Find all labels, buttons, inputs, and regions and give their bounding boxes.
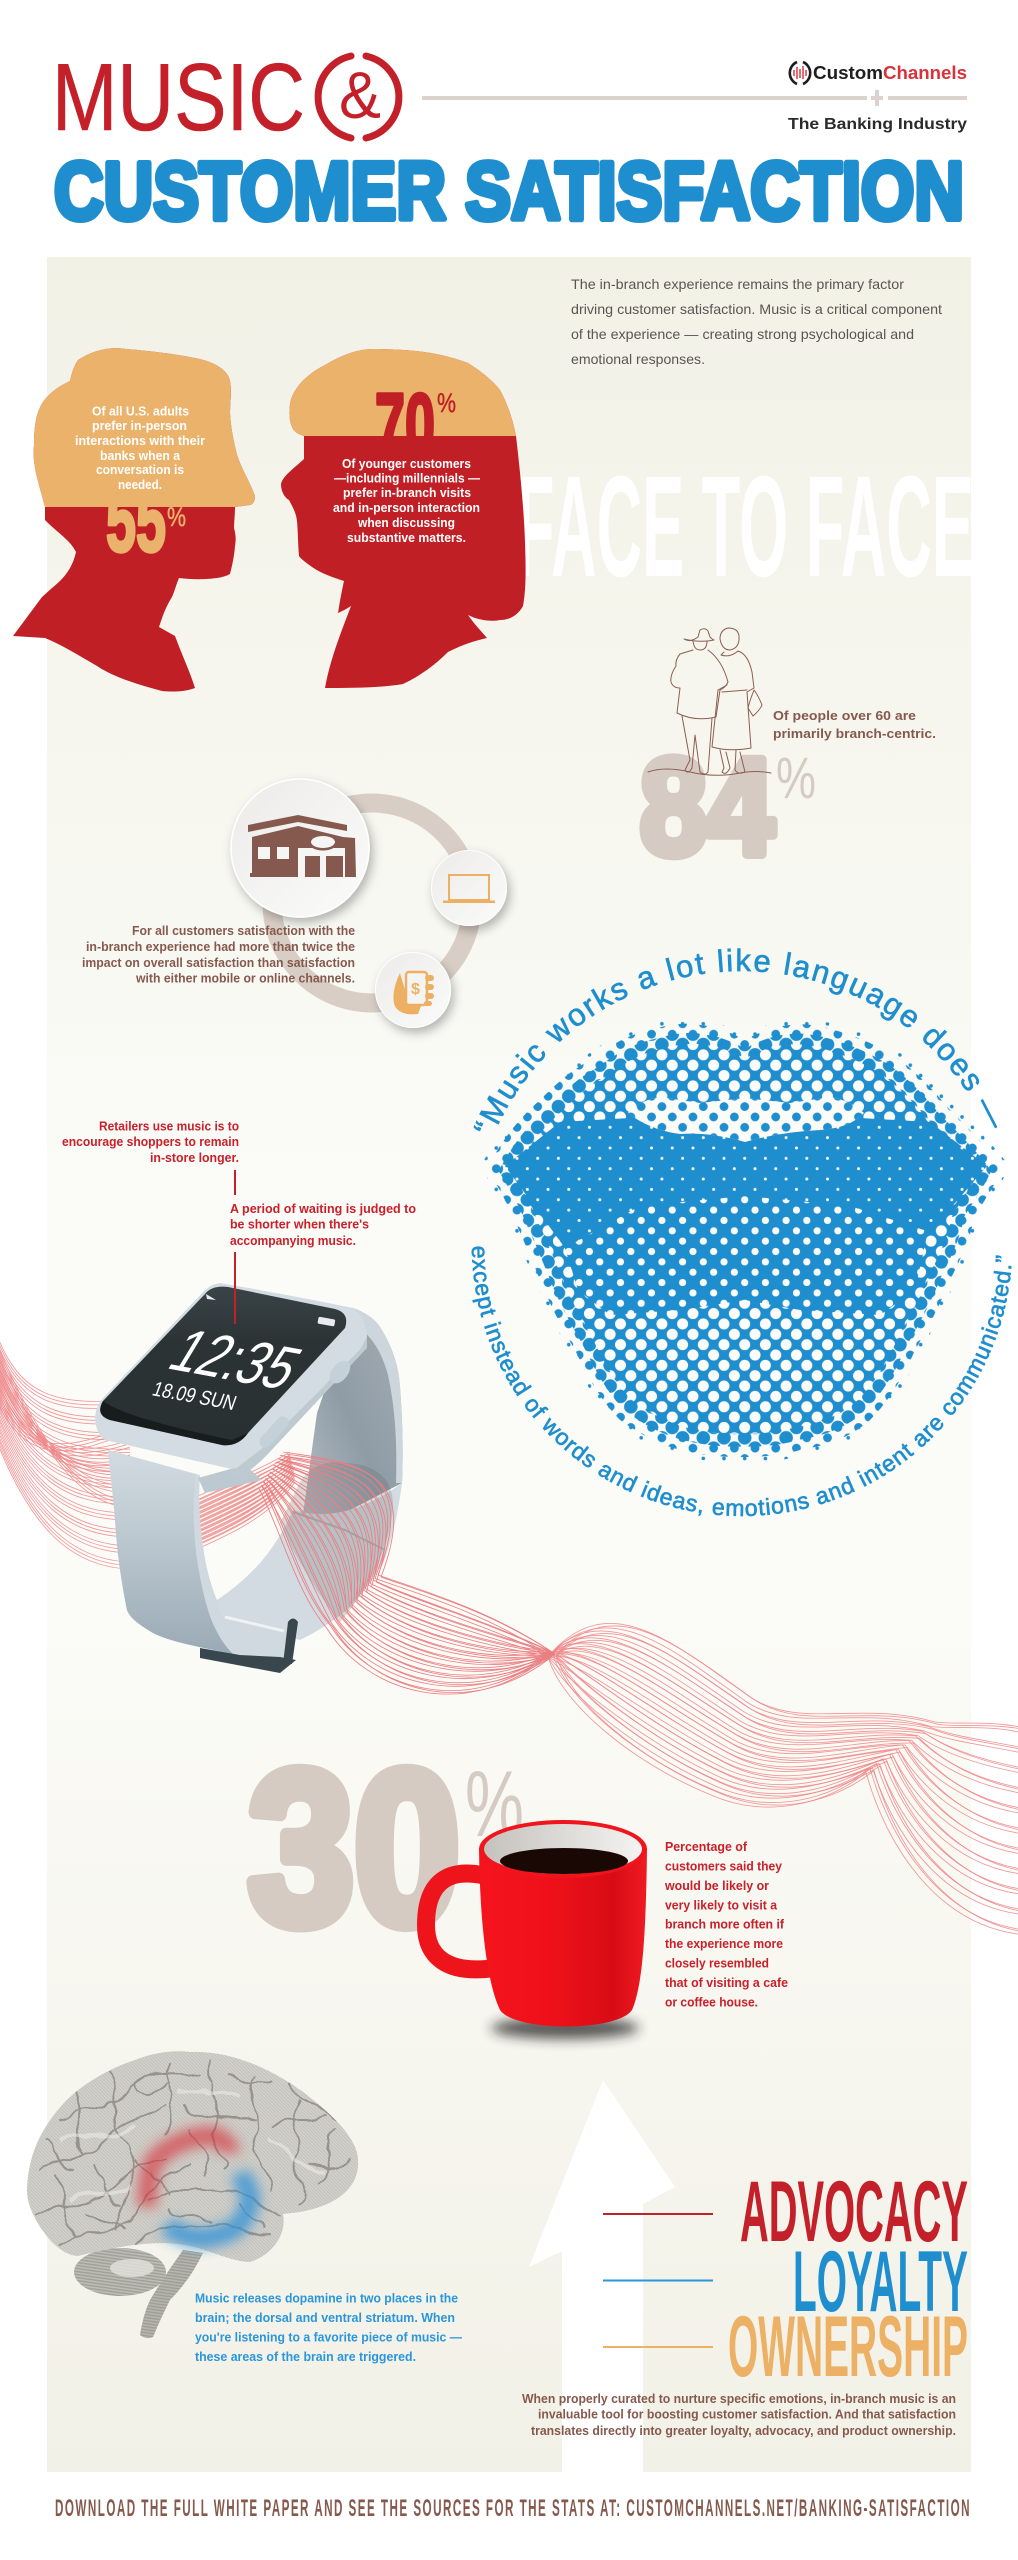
text: younger customers: and in-person interaction	[333, 501, 480, 515]
icon: mobile banking: $	[411, 981, 420, 998]
decorative sound wave right	[548, 1623, 1018, 1934]
stat: 30 percent: %	[465, 1751, 524, 1856]
text: dopamine: Music releases dopamine in two places in the	[195, 2290, 458, 2306]
text: waiting period: be shorter when there's	[230, 1218, 369, 1232]
text: coffee house percentage: branch more often if	[665, 1918, 785, 1932]
quote: circular music quotation: except instead of words and ideas, emotions and intent are communicated.”	[472, 1246, 1012, 1516]
divider with plus	[422, 90, 967, 106]
chart: satisfaction channel ring	[82, 779, 506, 1028]
stat: 55 percent: %	[167, 502, 186, 532]
illustration: smart watch: 18.09 SUN	[149, 1378, 239, 1415]
text: channel comparison: impact on overall satisfaction than satisfaction	[82, 956, 355, 970]
text: coffee house percentage: would be likely or	[664, 1879, 769, 1893]
logo: custom channels: Channels	[883, 63, 967, 83]
icon: laptop	[432, 850, 506, 926]
decorative sound wave left and between straps	[0, 1330, 295, 1569]
text: dopamine: these areas of the brain are triggered.	[195, 2349, 416, 2364]
title: music and	[52, 44, 399, 151]
silhouette: woman with 70 percent	[281, 349, 526, 688]
text: waiting period	[230, 1202, 416, 1248]
text: all adults: banks when a	[100, 449, 181, 463]
intro text block	[571, 276, 942, 367]
text: coffee house percentage: the experience more	[665, 1937, 783, 1951]
quote: circular music quotation	[472, 948, 1012, 1516]
text: all adults: Of all U.S. adults	[92, 404, 189, 418]
cerebellum	[74, 2248, 166, 2296]
intro text block: emotional responses.	[571, 351, 705, 367]
text: closing statement: invaluable tool for boosting customer satisfaction. And that satisfaction	[538, 2408, 956, 2422]
intro text block: driving customer satisfaction. Music is a critical component	[571, 301, 942, 317]
decorative sound wave dome over band	[259, 1452, 555, 1694]
text: all adults: conversation is	[96, 463, 184, 477]
icon: ampersand in ring: &	[339, 58, 381, 132]
text: coffee house percentage	[664, 1840, 788, 2010]
text: all adults: interactions with their	[75, 434, 205, 448]
text: younger customers: Of younger customers	[342, 457, 471, 471]
text: closing statement	[522, 2392, 956, 2438]
watch strap connector	[198, 1465, 262, 1493]
watch time readout: 12:35	[158, 1316, 314, 1402]
watch status icons	[206, 1294, 335, 1327]
text: dopamine: brain; the dorsal and ventral striatum. When	[195, 2310, 455, 2325]
subheading: the banking industry: The Banking Industry	[788, 116, 967, 133]
outcome lines	[603, 2214, 713, 2347]
text: channel comparison	[82, 924, 355, 986]
stat: 70 percent: 70	[375, 375, 435, 474]
text: coffee house percentage: or coffee house.	[665, 1996, 758, 2010]
watch body	[95, 1283, 367, 1469]
quote: circular music quotation: “Music works a lot like language does —	[474, 948, 998, 1132]
watch clasp	[200, 1618, 298, 1673]
panel: main background	[47, 257, 971, 2472]
text: people over 60	[773, 709, 936, 741]
text: people over 60: primarily branch-centric.	[773, 727, 936, 741]
icon: white up arrow	[529, 2080, 675, 2472]
text: dopamine	[195, 2290, 462, 2364]
intro text block: The in-branch experience remains the primary factor	[571, 276, 904, 292]
icon: mobile banking	[376, 952, 450, 1028]
logo: custom channels	[790, 62, 967, 84]
brand name: Custom	[813, 63, 883, 83]
text: younger customers: —including millennials —	[334, 472, 480, 486]
watch left strap	[108, 1450, 293, 1660]
text: waiting period: A period of waiting is judged to	[230, 1202, 416, 1216]
connector lines from watch text	[234, 1170, 236, 1324]
watch back band upper	[300, 1308, 403, 1536]
text: all adults: needed.	[118, 478, 162, 492]
silhouette: man with 55 percent	[13, 348, 255, 692]
text: coffee house percentage: Percentage of	[665, 1840, 748, 1854]
text: closing statement: When properly curated to nurture specific emotions, in-branch music is an	[522, 2392, 956, 2406]
stat: 55 percent: 55	[106, 471, 166, 570]
text: retailers use music: Retailers use music is to	[99, 1120, 239, 1134]
icon: elderly couple line drawing	[648, 628, 771, 775]
illustration: smart watch	[95, 1283, 403, 1673]
intro text block: of the experience — creating strong psychological and	[571, 326, 914, 342]
illustration: brain with highlighted regions	[20, 2045, 365, 2338]
illustration: red coffee mug	[426, 1820, 647, 2039]
heading: advocacy loyalty ownership	[728, 2164, 968, 2395]
text: channel comparison: in-branch experience had more than twice the	[86, 940, 355, 954]
stat: 84 percent: 84	[640, 731, 774, 884]
stat: 30 percent: 30	[248, 1727, 460, 1970]
icon: ampersand in ring	[318, 56, 399, 138]
text: younger customers: when discussing	[357, 516, 455, 530]
icon: halftone mouth and tongue	[484, 1022, 1004, 1460]
brain stem	[140, 2250, 203, 2338]
text: all adults	[75, 404, 205, 492]
text: people over 60: Of people over 60 are	[773, 709, 916, 723]
text: younger customers	[333, 457, 480, 545]
text: dopamine: you're listening to a favorite piece of music —	[195, 2330, 462, 2344]
text: retailers use music: in-store longer.	[150, 1151, 239, 1165]
text: younger customers: substantive matters.	[347, 531, 466, 545]
text: coffee house percentage: very likely to visit a	[665, 1898, 778, 1912]
text: coffee house percentage: that of visiting a cafe	[665, 1976, 788, 1990]
stat: 70 percent: %	[437, 388, 456, 418]
heading word: music: MUSIC	[52, 44, 305, 151]
stat: 84 percent: %	[776, 746, 816, 811]
text: retailers use music	[62, 1120, 239, 1165]
watch screen	[100, 1287, 346, 1445]
text: retailers use music: encourage shoppers to remain	[62, 1135, 239, 1149]
cerebral cortex	[20, 2045, 365, 2270]
text: waiting period: accompanying music.	[230, 1234, 356, 1248]
text: younger customers: prefer in-branch visits	[343, 486, 471, 500]
icon: logo mark	[790, 62, 810, 84]
text: closing statement: translates directly into greater loyalty, advocacy, and product ownership.	[531, 2424, 956, 2438]
icon: bank branch	[231, 779, 369, 917]
text: coffee house percentage: customers said they	[665, 1860, 782, 1874]
text: all adults: prefer in-person	[92, 419, 187, 433]
text: channel comparison: with either mobile or online channels.	[135, 972, 355, 986]
text: coffee house percentage: closely resembled	[665, 1956, 769, 1970]
text: channel comparison: For all customers satisfaction with the	[132, 924, 355, 938]
